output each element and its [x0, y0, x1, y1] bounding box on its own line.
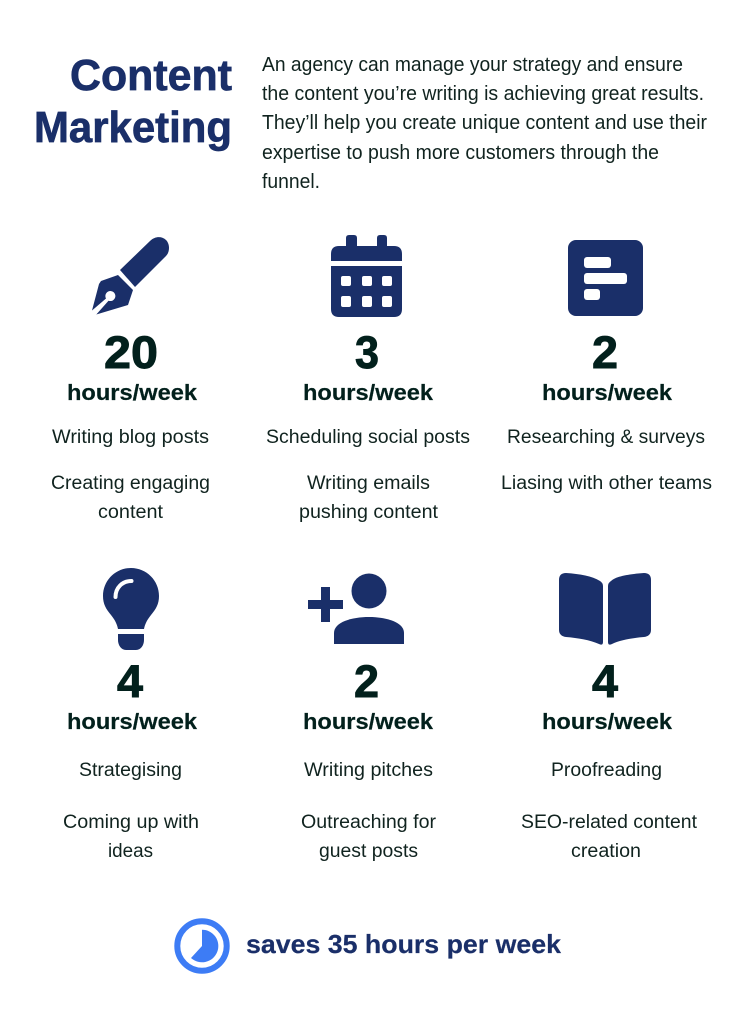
savings text: saves 35 hours per week — [246, 929, 562, 959]
tasks: scheduling — [266, 427, 470, 523]
panel: proofreading — [521, 573, 698, 862]
tasks: research: Researching & surveys — [507, 427, 705, 448]
tasks: proofreading: SEO-related content — [521, 812, 698, 833]
stat: 20 hours: 20 — [104, 327, 158, 378]
panel: strategy — [63, 568, 199, 862]
title — [34, 51, 232, 152]
stat: 2 hours: 2 — [592, 327, 618, 378]
tasks: outreach — [301, 760, 437, 862]
intro text block: An agency can manage your strategy and ensure — [262, 54, 683, 76]
intro text block: expertise to push more customers through the — [262, 142, 659, 164]
stat: 3 hours: hours/week — [303, 380, 434, 405]
icon: fountain pen — [92, 237, 169, 314]
icon: add person — [308, 574, 404, 644]
tasks: writing: Writing blog posts — [52, 427, 209, 448]
tasks: strategy: Coming up with — [63, 812, 199, 833]
stat: 2 hours: 2 — [354, 656, 379, 707]
panel: research — [501, 240, 712, 494]
tasks: outreach: guest posts — [319, 841, 418, 862]
tasks: writing: Creating engaging — [51, 473, 210, 494]
stat: 2 hours — [542, 327, 673, 405]
tasks: research — [501, 427, 712, 494]
title: Marketing — [34, 103, 232, 152]
stat: 4 hours: 4 — [117, 656, 143, 707]
intro text block: funnel. — [262, 171, 320, 193]
stat: 20 hours — [67, 327, 198, 405]
stat: 4 hours — [67, 656, 198, 734]
icon: open book — [559, 573, 651, 645]
stat: 4 hours: hours/week — [542, 709, 673, 734]
tasks: research: Liasing with other teams — [501, 473, 712, 494]
icon: calendar — [331, 235, 402, 317]
stat: 20 hours: hours/week — [67, 380, 198, 405]
icon: document with bars — [568, 240, 643, 316]
stat: 4 hours — [542, 656, 673, 734]
intro text block — [262, 54, 707, 193]
tasks: scheduling: Scheduling social posts — [266, 427, 470, 448]
intro text block: the content you’re writing is achieving great results. — [262, 83, 704, 105]
stat: 2 hours: hours/week — [303, 709, 434, 734]
tasks: proofreading — [521, 760, 698, 862]
tasks: outreach: Outreaching for — [301, 812, 437, 833]
title: Content — [70, 51, 232, 100]
tasks: strategy: ideas — [108, 841, 153, 862]
stat: 4 hours: 4 — [592, 656, 618, 707]
stat: 4 hours: hours/week — [67, 709, 198, 734]
stat: 2 hours — [303, 656, 434, 734]
tasks: strategy — [63, 760, 199, 862]
intro text block: They’ll help you create unique content and use their — [262, 112, 707, 134]
tasks: strategy: Strategising — [79, 760, 182, 781]
tasks: proofreading: creation — [571, 841, 641, 862]
tasks: outreach: Writing pitches — [304, 760, 433, 781]
stat: 2 hours: hours/week — [542, 380, 673, 405]
tasks: scheduling: Writing emails — [307, 473, 430, 494]
icon: clock — [177, 921, 227, 971]
stat: 3 hours: 3 — [355, 327, 379, 378]
panel: scheduling — [266, 235, 470, 523]
icon: light bulb — [103, 568, 159, 650]
tasks: writing — [51, 427, 210, 523]
stat: 3 hours — [303, 327, 434, 405]
tasks: proofreading: Proofreading — [551, 760, 662, 781]
tasks: writing: content — [98, 502, 164, 523]
tasks: scheduling: pushing content — [299, 502, 439, 523]
callout: total saved — [177, 921, 562, 971]
panel: outreach — [301, 574, 437, 862]
panel: writing — [51, 237, 210, 523]
